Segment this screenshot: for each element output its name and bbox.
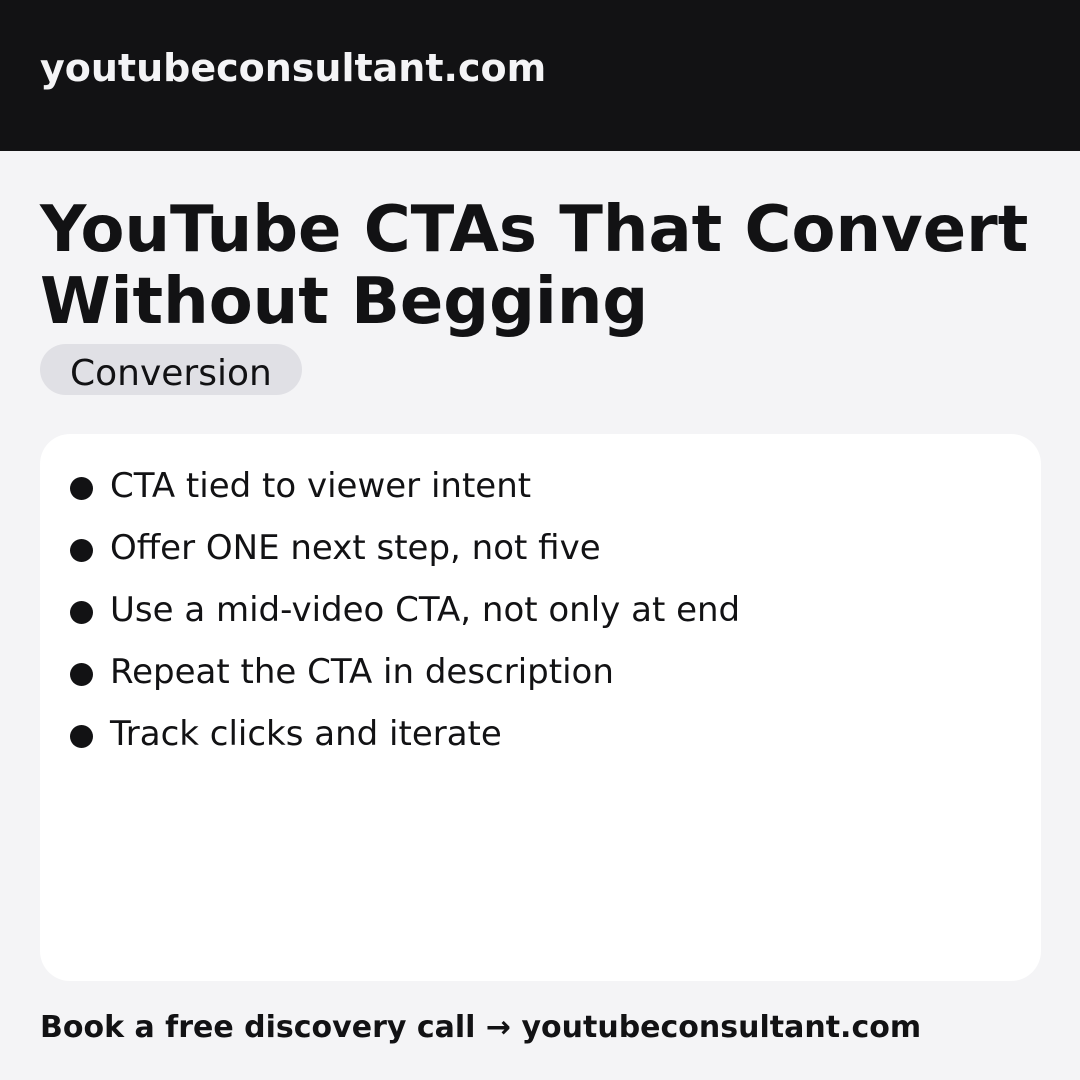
title: YouTube CTAs That Convert	[40, 193, 1028, 267]
site name: youtubeconsultant.com	[40, 46, 546, 90]
item 1	[70, 466, 531, 506]
item 3	[70, 590, 740, 630]
text: Use a mid-video CTA, not only at end	[110, 590, 740, 630]
text: CTA tied to viewer intent	[110, 466, 531, 506]
item 2	[70, 528, 601, 568]
item 4	[70, 652, 614, 692]
tag: Conversion: Conversion	[70, 353, 272, 394]
title: Without Begging	[40, 265, 648, 339]
text: Repeat the CTA in description	[110, 652, 614, 692]
tag: Conversion	[40, 344, 302, 395]
header bar	[0, 0, 1080, 151]
panel: checklist	[40, 434, 1041, 981]
text: Offer ONE next step, not five	[110, 528, 601, 568]
text: Track clicks and iterate	[110, 714, 502, 754]
title	[39, 193, 1028, 339]
item 5	[70, 714, 502, 754]
footer CTA: Book a free discovery call → youtubeconsultant.com	[40, 1010, 921, 1045]
